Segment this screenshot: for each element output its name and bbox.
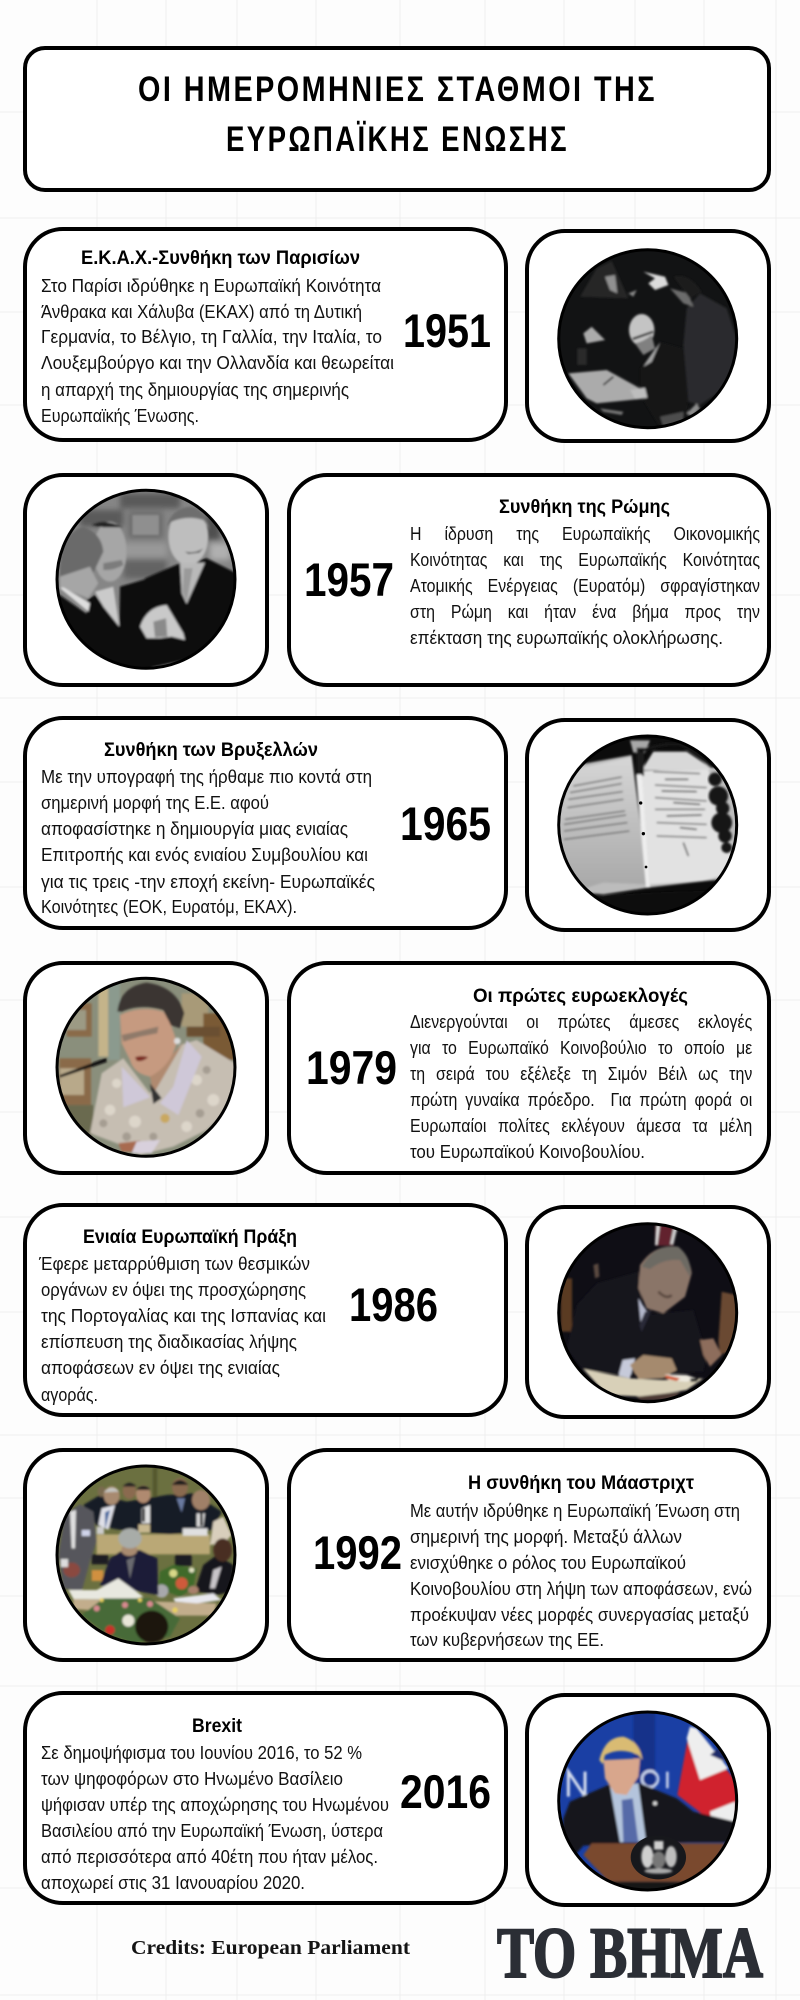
panel: 1986 text (25, 1205, 506, 1415)
credits line: Credits: European Parliament (131, 1937, 410, 1959)
body text 1979: τη σειρά του εξέλεξε τη Σιμόν Βέιλ ως την (410, 1063, 752, 1084)
body text 1965: Κοινότητες (ΕΟΚ, Ευρατόμ, ΕΚΑΧ). (41, 896, 297, 917)
year 1951: 1951 (403, 304, 491, 357)
body text 1957: στη Ρώμη και ήταν ένα βήμα προς την (410, 601, 760, 622)
year 1957: 1957 (304, 553, 394, 606)
title panel (25, 48, 769, 190)
body text 1992: ενισχύθηκε ο ρόλος του Ευρωπαϊκού (410, 1552, 686, 1573)
body text 1986: αγοράς. (41, 1384, 98, 1405)
year 1979: 1979 (306, 1041, 397, 1094)
title text: ΟΙ ΗΜΕΡΟΜΗΝΙΕΣ ΣΤΑΘΜΟΙ ΤΗΣ (138, 70, 657, 109)
body text 1986: της Πορτογαλίας και της Ισπανίας και (41, 1305, 326, 1326)
heading: ECSC treaty of Paris: Ε.Κ.Α.Χ.-Συνθήκη των Παρισίων (81, 247, 360, 269)
heading: Brexit: Brexit (192, 1715, 242, 1737)
body text 1965: Με την υπογραφή της ήρθαμε πιο κοντά στη (41, 766, 372, 787)
body text 1957: Κοινότητας και της Ευρωπαϊκής Κοινότητας (410, 549, 760, 570)
body text 1957: Η ίδρυση της Ευρωπαϊκής Οικονομικής (410, 523, 760, 544)
body text 1951: Στο Παρίσι ιδρύθηκε η Ευρωπαϊκή Κοινότητα (41, 275, 381, 296)
panel: 1992 text (289, 1450, 769, 1660)
body text 1986 (38, 1253, 326, 1405)
body text 1992: Με αυτήν ιδρύθηκε η Ευρωπαϊκή Ένωση στη (410, 1500, 740, 1521)
heading: Brussels treaty: Συνθήκη των Βρυξελλών (104, 739, 318, 761)
body text 2016: από περισσότερα από 40έτη που ήταν μέλος. (41, 1846, 378, 1867)
panel: 1965 photo (527, 720, 769, 930)
body text 1979: Διενεργούνται οι πρώτες άμεσες εκλογές (410, 1011, 752, 1032)
photo: Boris Johnson at a podium (553, 1708, 743, 1898)
body text 1951 (41, 275, 394, 426)
body text 1965: Επιτροπής και ενός ενιαίου Συμβουλίου και (41, 844, 368, 865)
body text 1951: η απαρχή της δημιουργίας της σημερινής (41, 379, 349, 400)
body text 1965: σημερινή μορφή της Ε.Ε. αφού (41, 792, 269, 813)
panel: 2016 text (25, 1693, 506, 1903)
body text 2016: ψήφισαν υπέρ της αποχώρησης του Ηνωμένου (41, 1794, 389, 1815)
body text 1979: για το Ευρωπαϊκό Κοινοβούλιο το οποίο με (410, 1037, 752, 1058)
panel: 1979 text (289, 963, 769, 1173)
body text 1986: Έφερε μεταρρύθμιση των θεσμικών (38, 1253, 310, 1274)
year 1992: 1992 (313, 1526, 402, 1579)
body text 2016 (41, 1742, 389, 1893)
panel: 1951 text (25, 229, 506, 440)
body text 1951: Γερμανία, το Βέλγιο, τη Γαλλία, την Ιταλία, το (41, 326, 382, 347)
body text 1979: Ευρωπαίοι πολίτες εκλέγουν άμεσα τα μέλη (410, 1115, 752, 1136)
body text 1957: Ατομικής Ενέργειας (Ευρατόμ) σφραγίστηκαν (410, 575, 760, 596)
panel: 1979 photo (25, 963, 267, 1173)
body text 2016: των ψηφοφόρων στο Ηνωμένο Βασίλειο (41, 1768, 343, 1789)
year 1986: 1986 (349, 1278, 438, 1331)
year 1965: 1965 (400, 797, 491, 850)
body text 1992: σημερινή της μορφή. Μεταξύ άλλων (410, 1526, 682, 1547)
panel: 1986 photo (527, 1207, 769, 1417)
panel: 1957 photo (25, 475, 267, 685)
body text 2016: Βασιλείου από την Ευρωπαϊκή Ένωση, ύστερα (41, 1820, 383, 1841)
body text 1992: Κοινοβουλίου στη λήψη των αποφάσεων, ενώ (410, 1578, 752, 1599)
heading: Maastricht treaty: Η συνθήκη του Μάαστριχτ (468, 1472, 694, 1494)
body text 1951: Άνθρακα και Χάλυβα (ΕΚΑΧ) από τη Δυτική (41, 301, 362, 322)
body text 1965 (41, 766, 375, 917)
heading: Treaty of Rome: Συνθήκη της Ρώμης (499, 496, 670, 518)
body text 1965: για τις τρεις -την εποχή εκείνη- Ευρωπαϊκές (41, 871, 375, 892)
heading: first European elections: Οι πρώτες ευρωεκλογές (473, 985, 688, 1007)
body text 1986: οργάνων εν όψει της προσχώρησης (41, 1279, 306, 1300)
photo: signing of the Single European Act (553, 1218, 743, 1408)
body text 1951: Λουξεμβούργο και την Ολλανδία και θεωρείται (41, 352, 394, 373)
photo: signed treaty book (553, 731, 743, 921)
body text 1992: προέκυψαν νέες μορφές συνεργασίας μεταξύ (410, 1604, 749, 1625)
body text 1951: Ευρωπαϊκής Ένωσης. (41, 405, 199, 426)
body text 1957 (410, 521, 770, 648)
panel: 1965 text (25, 718, 506, 928)
body text 1992: των κυβερνήσεων της ΕΕ. (410, 1629, 604, 1650)
panel: 1992 photo (25, 1450, 267, 1660)
body text 1979: του Ευρωπαϊκού Κοινοβουλίου. (410, 1141, 645, 1162)
body text 1986: αποφάσεων εν όψει της ενιαίας (41, 1357, 280, 1378)
panel: 1957 text (289, 475, 770, 685)
body text 2016: αποχωρεί στις 31 Ιανουαρίου 2020. (41, 1872, 305, 1893)
body text 1992 (410, 1500, 752, 1650)
year 2016: 2016 (400, 1765, 491, 1818)
photo: signing of the Paris treaty (553, 245, 743, 435)
body text 1979: πρώτη γυναίκα πρόεδρο. Για πρώτη φορά οι (410, 1089, 752, 1110)
panel: 2016 photo (527, 1695, 769, 1905)
body text 1965: αποφασίστηκε η δημιουργία μιας ενιαίας (41, 818, 348, 839)
heading: Single European Act: Ενιαία Ευρωπαϊκή Πράξη (83, 1226, 297, 1248)
body text 2016: Σε δημοψήφισμα του Ιουνίου 2016, το 52 % (41, 1742, 362, 1763)
body text 1979 (410, 1009, 755, 1162)
body text 1986: επίσπευση της διαδικασίας λήψης (41, 1331, 297, 1352)
photo: Simone Veil (53, 973, 240, 1160)
photo: Maastricht treaty signing (53, 1462, 240, 1648)
title panel: ΕΥΡΩΠΑΪΚΗΣ ΕΝΩΣΗΣ (226, 120, 569, 159)
panel: 1951 photo (527, 231, 769, 441)
photo: Treaty of Rome signatories (53, 487, 240, 673)
body text 1957: επέκταση της ευρωπαϊκής ολοκλήρωσης. (410, 627, 723, 648)
